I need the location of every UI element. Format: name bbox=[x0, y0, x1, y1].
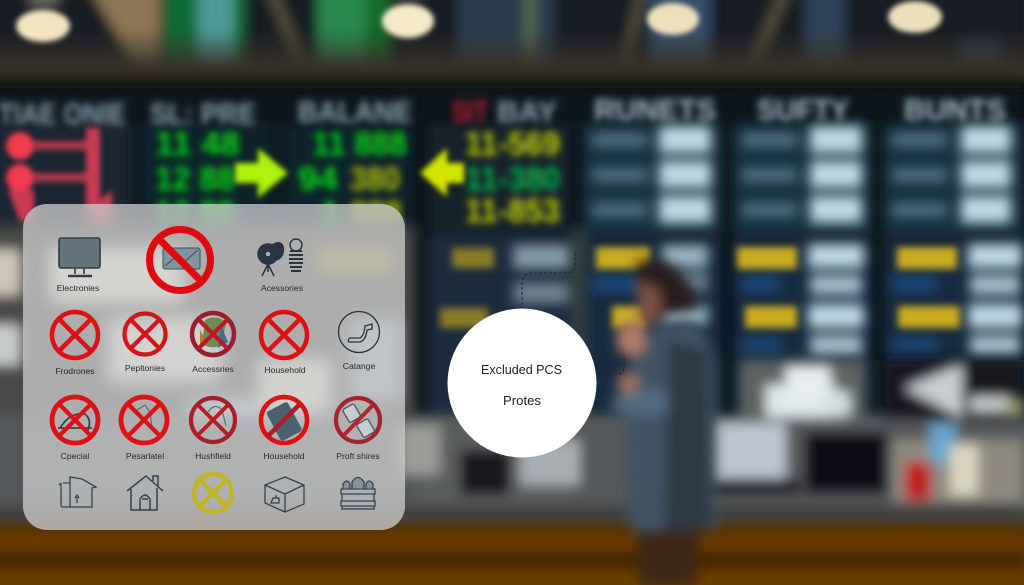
green and yellow board numbers: 11-569 bbox=[465, 125, 560, 162]
label: Pepltonies: Pepltonies bbox=[125, 363, 165, 373]
label: Catange: Catange bbox=[343, 361, 375, 371]
green and yellow board numbers: 12 88 bbox=[155, 160, 235, 197]
board arrows bbox=[235, 148, 464, 198]
icon: crossed circle 2 bbox=[124, 314, 166, 354]
green and yellow board numbers: 94 bbox=[298, 160, 339, 197]
label: Household: Household bbox=[263, 451, 305, 461]
icon: yellow crossed circle bbox=[194, 474, 232, 512]
board headings: SL: PRE bbox=[150, 98, 256, 131]
board headings: BUNTS bbox=[904, 94, 1006, 127]
icon: crossed circle 4 bbox=[261, 312, 307, 358]
green and yellow board numbers: 12 88 bbox=[155, 194, 235, 231]
dashed connector to person bbox=[594, 355, 624, 374]
label: Hushfield: Hushfield bbox=[195, 451, 231, 461]
callout text: Excluded PCS: Excluded PCS bbox=[481, 362, 562, 377]
pale blue cells on the right board bbox=[513, 126, 1022, 355]
red ladder chart on the board bbox=[6, 128, 112, 225]
icon: golf club in circle bbox=[338, 312, 380, 352]
board headings: SUFTY bbox=[757, 94, 849, 127]
hanging lights bbox=[16, 1, 942, 42]
label: Pesarlatel: Pesarlatel bbox=[126, 451, 164, 461]
label: Frodrones: Frodrones bbox=[55, 366, 95, 376]
label: Cpecial: Cpecial bbox=[61, 451, 89, 461]
blurred person bbox=[612, 260, 716, 585]
label: Electronies: Electronies bbox=[57, 283, 99, 293]
green and yellow board numbers: 11 888 bbox=[312, 125, 407, 162]
icon: building bbox=[59, 477, 96, 507]
board headings bbox=[0, 94, 1006, 131]
shelves and counter items bbox=[0, 225, 1024, 527]
board headings: BALANE bbox=[298, 96, 412, 129]
label: Acessories: Acessories bbox=[261, 283, 303, 293]
icon: stacked crate bbox=[341, 478, 375, 509]
green and yellow board numbers: 888 bbox=[350, 194, 402, 231]
dashed connector to board bbox=[522, 250, 575, 310]
board headings: RUNETS bbox=[594, 94, 716, 127]
green and yellow board numbers: 380 bbox=[350, 160, 400, 197]
label: Household: Household bbox=[264, 365, 306, 375]
yellow lower board numbers bbox=[440, 247, 960, 328]
ceiling with coloured reflections and lights bbox=[0, 0, 1024, 92]
white circle bbox=[448, 308, 596, 458]
wooden counter front bbox=[0, 525, 1024, 585]
green and yellow board numbers bbox=[155, 125, 560, 231]
green and yellow board numbers: 11-380 bbox=[465, 160, 560, 197]
board panels bbox=[0, 90, 1024, 420]
icon: crossed tools bbox=[336, 398, 380, 442]
label: Proft shires: Proft shires bbox=[336, 451, 380, 461]
icon: prohibited screen bbox=[150, 230, 210, 290]
label: Accessries: Accessries bbox=[192, 364, 234, 374]
icon: crossed phone bbox=[261, 397, 307, 443]
icon: box bbox=[265, 477, 304, 512]
board headings: TIAE ONIE bbox=[0, 98, 126, 131]
green and yellow board numbers: 1 bbox=[320, 194, 340, 231]
icon: crossed circle 1 bbox=[52, 312, 98, 358]
icon: crossed object 2 bbox=[121, 397, 167, 443]
icon: crossed circle with coloured accessory bbox=[192, 313, 234, 355]
icon: crossed object 1 bbox=[52, 397, 98, 443]
icon: house bbox=[127, 476, 163, 510]
icon: crossed object 3 bbox=[191, 398, 235, 442]
green and yellow board numbers: 11 48 bbox=[155, 125, 240, 162]
green and yellow board numbers: 11-853 bbox=[465, 192, 560, 229]
board headings: BAY bbox=[497, 96, 557, 129]
callout text: Protes: Protes bbox=[503, 393, 541, 408]
board headings: SIT bbox=[452, 96, 488, 129]
icon: camera and stack accessories bbox=[258, 239, 303, 276]
icon: monitor bbox=[59, 238, 100, 276]
panel: excluded product categories bbox=[23, 204, 405, 530]
